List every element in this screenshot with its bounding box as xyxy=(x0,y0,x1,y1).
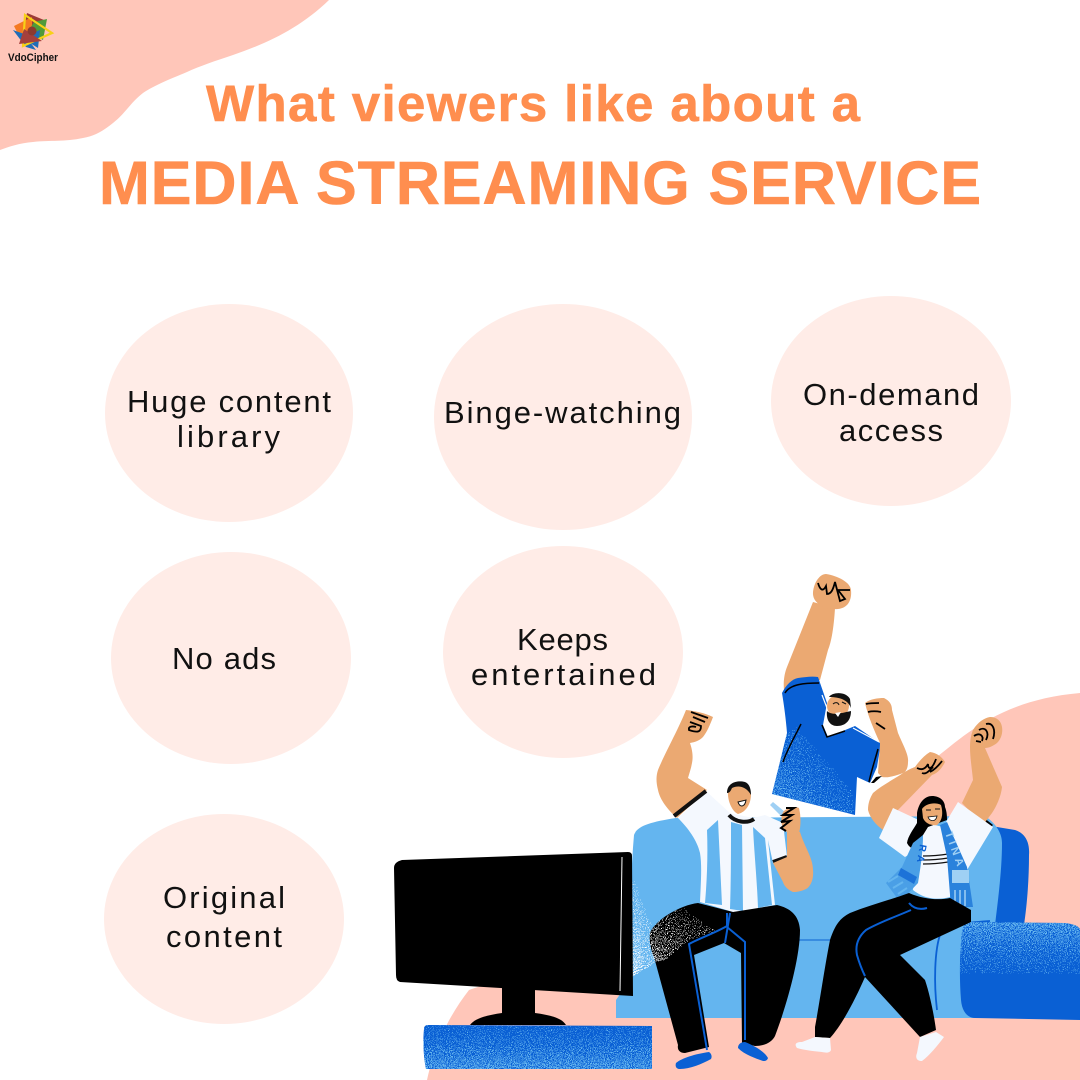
bubble: Keeps entertained xyxy=(443,546,683,758)
TV bench xyxy=(423,1025,652,1069)
raised fist xyxy=(813,574,851,609)
bubble: Huge content library: Huge content xyxy=(127,384,331,419)
bubble: Binge-watching xyxy=(434,304,692,530)
shirt grain xyxy=(772,722,855,815)
trouser piping xyxy=(689,913,745,1050)
sofa arm xyxy=(934,921,1000,1018)
bubble: Huge content library: library xyxy=(177,419,280,454)
bubble: Original content xyxy=(104,814,344,1024)
illustration: fans watching TV xyxy=(394,574,1080,1069)
right arm xyxy=(865,698,908,777)
top stripes xyxy=(923,854,948,864)
title line 2: MEDIA STREAMING SERVICE xyxy=(99,149,981,217)
TV xyxy=(394,852,633,1025)
background blob: top left xyxy=(0,0,329,150)
title line 1: What viewers like about a xyxy=(206,75,861,132)
striped shirt xyxy=(678,792,787,912)
forearm and fist xyxy=(773,830,813,892)
bubble: No ads xyxy=(111,552,351,764)
sofa xyxy=(616,816,1080,1020)
sofa body xyxy=(616,816,1002,1018)
TV screen xyxy=(394,852,633,996)
shoes xyxy=(676,1042,768,1069)
blue shirt xyxy=(772,677,880,815)
scarf: RA xyxy=(914,843,928,863)
TV stand xyxy=(470,985,566,1025)
scarf: TINA xyxy=(942,830,966,868)
sofa seam xyxy=(799,939,832,941)
shirt seams xyxy=(783,683,878,782)
woman with scarf xyxy=(796,717,1002,1061)
right arm xyxy=(962,717,1002,825)
scarf left strand xyxy=(886,835,923,902)
head with beard xyxy=(827,693,851,726)
bubble: Original content: content xyxy=(166,919,282,954)
hair xyxy=(907,796,947,848)
sleeve end xyxy=(871,776,882,783)
bubble: Keeps entertained: entertained xyxy=(471,657,656,692)
logo wordmark: VdoCipher xyxy=(8,52,59,64)
trouser piping xyxy=(856,903,927,976)
shirt stripes xyxy=(705,820,772,911)
title xyxy=(99,75,981,217)
blue cushion xyxy=(960,922,1080,1020)
logo: VdoCipher xyxy=(8,13,59,64)
cushion grain xyxy=(960,922,1080,985)
black trousers xyxy=(650,903,800,1053)
black under right sleeve xyxy=(978,817,993,830)
scarf xyxy=(886,822,973,907)
raised arm xyxy=(656,710,713,818)
bubble: On-demand access: On-demand xyxy=(803,377,979,412)
bubble: On-demand access: access xyxy=(839,413,943,448)
trouser grain xyxy=(650,903,733,962)
man in striped shirt xyxy=(650,710,813,1069)
background blob: bottom right xyxy=(427,693,1080,1080)
left arm xyxy=(868,752,945,830)
sofa side dark back xyxy=(985,825,1029,925)
bubble: Huge content library xyxy=(105,304,353,522)
bubble: No ads: No ads xyxy=(172,641,276,676)
socks xyxy=(796,1032,944,1061)
bubble: Binge-watching: Binge-watching xyxy=(444,395,681,430)
face xyxy=(922,803,942,825)
sofa grain near TV xyxy=(632,880,668,977)
bubble: Original content: Original xyxy=(163,880,285,915)
bubble: Keeps entertained: Keeps xyxy=(517,622,608,657)
scarf right strand xyxy=(940,822,973,907)
raised arm xyxy=(784,602,835,690)
white top and sleeves xyxy=(879,802,993,899)
sleeve cuffs and collar xyxy=(674,791,787,862)
logo mark: woven star xyxy=(13,13,52,50)
bubble: On-demand access xyxy=(771,296,1011,506)
head xyxy=(727,781,751,814)
black trousers xyxy=(815,893,971,1038)
shoulder band xyxy=(770,802,785,817)
man standing behind the sofa xyxy=(772,574,908,815)
